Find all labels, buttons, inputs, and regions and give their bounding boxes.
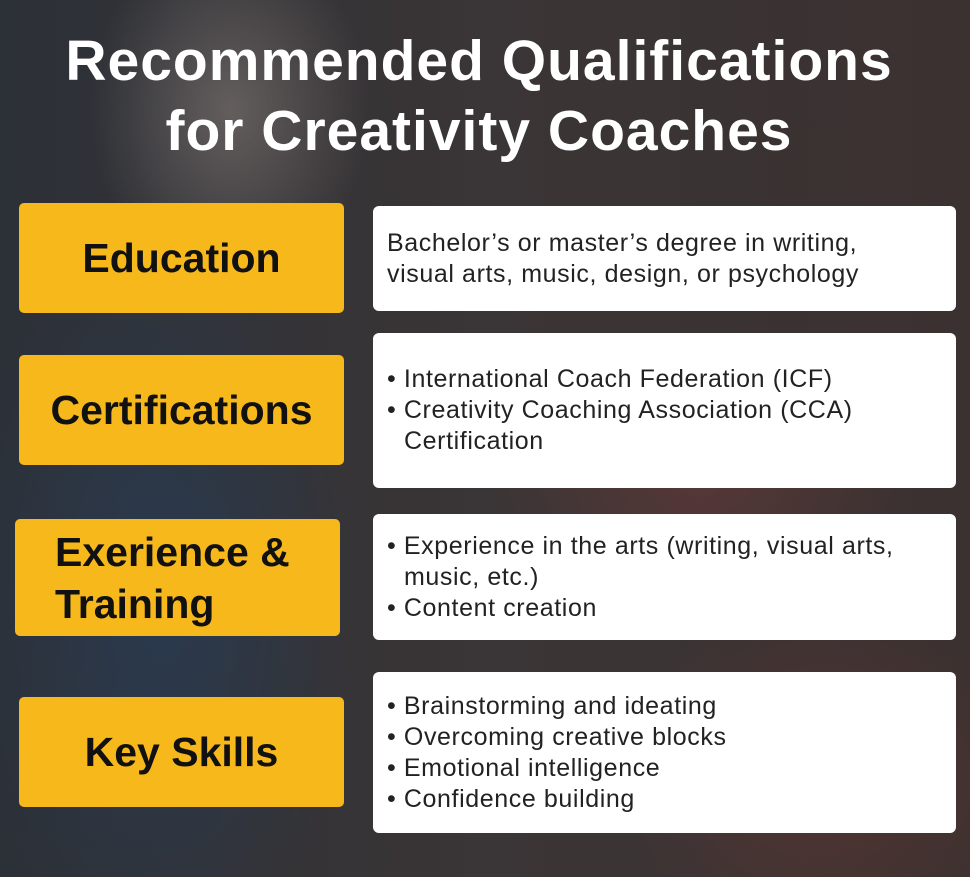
panel: key skills: • Emotional intelligence xyxy=(387,754,660,782)
label: Key Skills: Key Skills xyxy=(85,728,278,774)
label: Certifications xyxy=(19,355,344,465)
panel: key skills: • Confidence building xyxy=(387,784,635,812)
panel: key skills: • Brainstorming and ideating xyxy=(387,692,717,720)
panel: key skills: • Overcoming creative blocks xyxy=(387,722,727,750)
panel: key skills xyxy=(373,672,956,833)
panel: certifications: • International Coach Federation (ICF) xyxy=(387,365,833,393)
panel: education: visual arts, music, design, or psychology xyxy=(387,260,859,288)
title: for Creativity Coaches xyxy=(165,99,793,163)
panel: experience xyxy=(373,514,956,640)
panel: education xyxy=(373,206,956,311)
label: Experience & Training: Training xyxy=(55,580,214,626)
title xyxy=(65,29,893,163)
panel: experience: music, etc.) xyxy=(404,562,539,590)
title: Recommended Qualifications xyxy=(65,29,893,93)
panel: certifications: Certification xyxy=(404,427,544,455)
label: Certifications: Certifications xyxy=(50,386,312,432)
panel: experience: • Content creation xyxy=(387,594,597,622)
label: Key Skills xyxy=(19,697,344,807)
label: Education: Education xyxy=(82,234,281,280)
panel: certifications xyxy=(373,333,956,488)
panel: education: Bachelor’s or master’s degree in writing, xyxy=(387,228,857,256)
label: Experience & Training xyxy=(15,519,340,636)
label: Experience & Training: Exerience & xyxy=(55,528,290,574)
label: Education xyxy=(19,203,344,313)
panel: certifications: • Creativity Coaching Association (CCA) xyxy=(387,396,853,424)
panel: experience: • Experience in the arts (writing, visual arts, xyxy=(387,532,894,560)
